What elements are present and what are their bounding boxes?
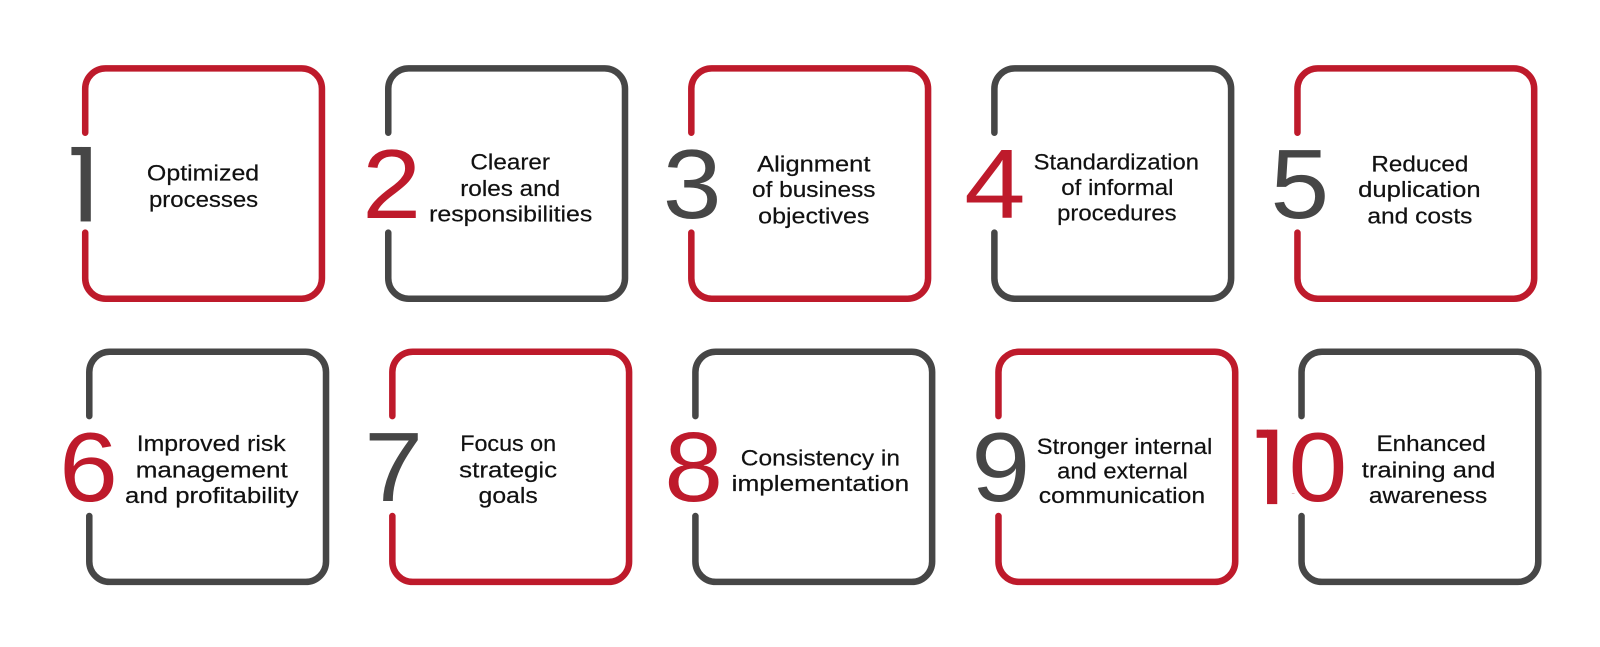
card 7: Focus on strategic goals: strategic [459, 458, 557, 483]
card 2: Clearer roles and responsibilities [362, 68, 625, 299]
card 1: Optimized processes: 1 [54, 129, 113, 239]
card 4: Standardization of informal procedures: 4 [964, 131, 1026, 239]
card 10: Enhanced training and awareness: awareness [1369, 483, 1487, 508]
card 8: Consistency in implementation: 8 [664, 413, 723, 522]
card 4: Standardization of informal procedures [964, 68, 1231, 299]
card 9: Stronger internal and external communication: and external [1057, 459, 1188, 484]
card 10: Enhanced training and awareness: Enhanced [1377, 431, 1486, 456]
card 10: Enhanced training and awareness [1241, 352, 1538, 582]
card 2: Clearer roles and responsibilities: Clearer [470, 149, 550, 174]
card 8: Consistency in implementation: Consistency in [741, 445, 900, 470]
card 3: Alignment of business objectives: of business [752, 177, 876, 202]
card 4: Standardization of informal procedures: Standardization [1034, 149, 1199, 174]
card 3: Alignment of business objectives [663, 68, 928, 299]
card 6: Improved risk management and profitability: management [136, 458, 288, 483]
card 6: Improved risk management and profitability [59, 352, 326, 582]
card 7: Focus on strategic goals [364, 352, 629, 582]
card 9: Stronger internal and external communication: 9 [971, 413, 1030, 522]
card 9: Stronger internal and external communication [971, 352, 1235, 582]
card 8: Consistency in implementation: implementation [732, 471, 909, 496]
card 4: Standardization of informal procedures: procedures [1057, 200, 1177, 225]
card 1: Optimized processes: processes [149, 187, 258, 212]
card 10: Enhanced training and awareness: training and [1362, 458, 1495, 483]
card 9: Stronger internal and external communication: communication [1039, 483, 1205, 508]
card 9: Stronger internal and external communication: Stronger internal [1037, 434, 1212, 459]
card 7: Focus on strategic goals: goals [479, 483, 538, 508]
card 3: Alignment of business objectives: objectives [758, 204, 869, 229]
card 2: Clearer roles and responsibilities: 2 [362, 129, 421, 239]
card 5: Reduced duplication and costs: Reduced [1371, 151, 1468, 176]
card 10: Enhanced training and awareness: 10 [1241, 413, 1347, 522]
card 7: Focus on strategic goals: 7 [364, 413, 423, 522]
card 3: Alignment of business objectives: 3 [663, 129, 722, 239]
card 6: Improved risk management and profitability: 6 [59, 413, 118, 522]
card 6: Improved risk management and profitability: and profitability [125, 483, 299, 508]
card 4: Standardization of informal procedures: of informal [1061, 175, 1173, 200]
card 5: Reduced duplication and costs: duplication [1358, 177, 1481, 202]
card 1: Optimized processes: Optimized [147, 161, 259, 186]
card 6: Improved risk management and profitability: Improved risk [137, 431, 286, 456]
card 5: Reduced duplication and costs: 5 [1270, 129, 1329, 239]
card 2: Clearer roles and responsibilities: roles and [460, 176, 560, 201]
card 2: Clearer roles and responsibilities: responsibilities [429, 201, 592, 226]
card 5: Reduced duplication and costs: and costs [1367, 204, 1472, 229]
card 7: Focus on strategic goals: Focus on [460, 431, 556, 456]
card 1: Optimized processes [54, 68, 322, 299]
card 5: Reduced duplication and costs [1270, 68, 1534, 299]
card 3: Alignment of business objectives: Alignment [757, 151, 870, 176]
card 8: Consistency in implementation [664, 352, 932, 582]
